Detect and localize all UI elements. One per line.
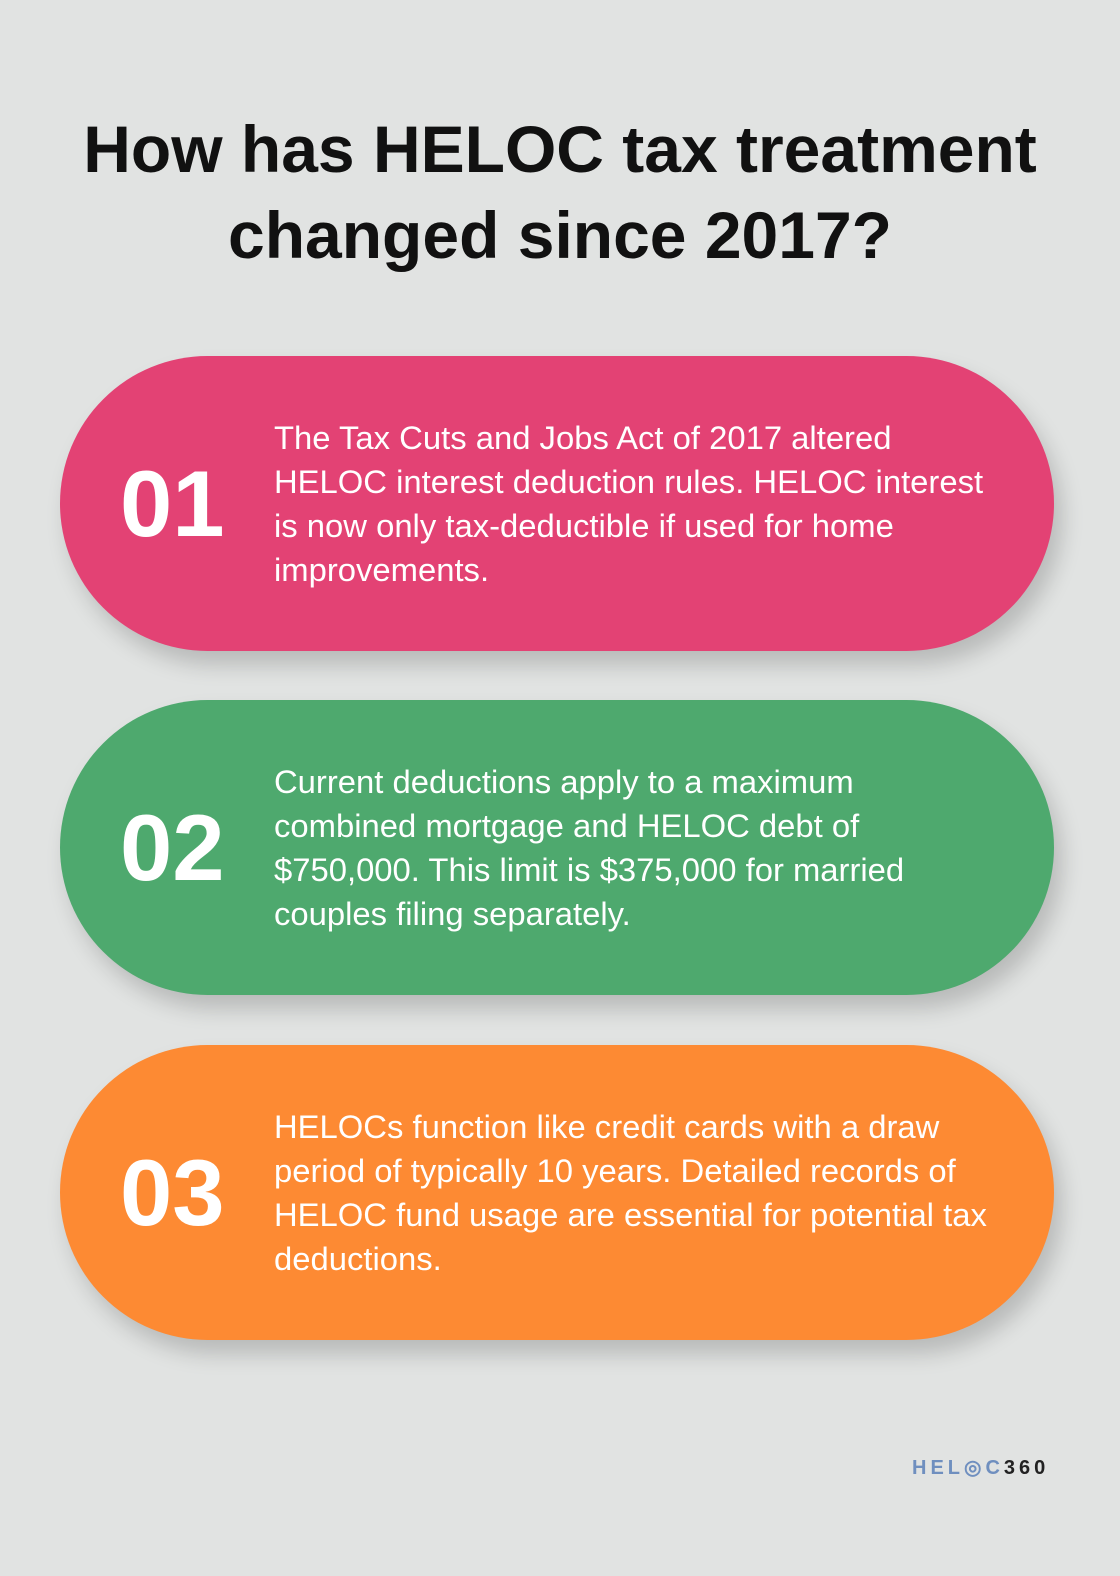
text 01: is now only tax-deductible if used for home	[274, 506, 894, 544]
text 02: Current deductions apply to a maximum	[274, 762, 854, 800]
title: changed since 2017?	[228, 198, 892, 272]
text 01: HELOC interest deduction rules. HELOC interest	[274, 462, 983, 500]
panel: card 03	[60, 1045, 1054, 1340]
title: How has HELOC tax treatment	[83, 112, 1037, 186]
text 02: couples filing separately.	[274, 894, 631, 932]
number 02: 02	[120, 795, 225, 900]
text 03	[274, 1108, 987, 1276]
logo: HEL◎C360	[912, 1457, 1049, 1479]
text 03: HELOCs function like credit cards with a draw	[274, 1108, 939, 1144]
text 02	[274, 762, 904, 932]
text 02: combined mortgage and HELOC debt of	[274, 806, 859, 844]
text 01: The Tax Cuts and Jobs Act of 2017 altered	[274, 418, 891, 456]
panel: card 02	[60, 700, 1054, 995]
text 03: HELOC fund usage are essential for potential tax	[274, 1196, 987, 1232]
number 01: 01	[120, 451, 225, 556]
title	[83, 112, 1037, 272]
number 03: 03	[120, 1140, 225, 1245]
text 01	[274, 418, 983, 588]
text 03: period of typically 10 years. Detailed records of	[274, 1152, 956, 1188]
panel: card 01	[60, 356, 1054, 651]
text 02: $750,000. This limit is $375,000 for married	[274, 850, 904, 888]
text 01: improvements.	[274, 550, 489, 588]
text 03: deductions.	[274, 1240, 442, 1276]
